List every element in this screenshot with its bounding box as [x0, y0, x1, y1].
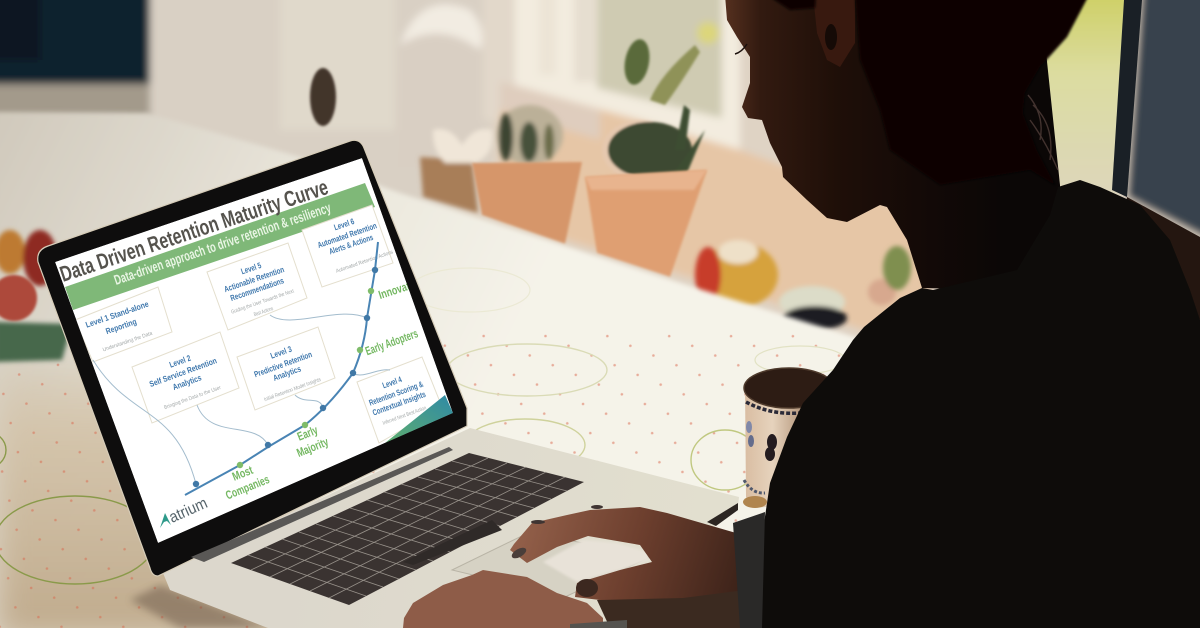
laptop lid and bezel — [38, 140, 467, 576]
woman: hair — [767, 0, 1089, 186]
level 6 box: Level 6 — [332, 216, 356, 232]
curve adoption markers — [237, 288, 374, 468]
maturity curve — [185, 242, 378, 495]
atrium logo: atrium — [167, 495, 210, 527]
photo: table with polka dots — [0, 112, 900, 628]
level 6 box: Alerts & Actions — [328, 232, 375, 256]
level 2 box: Level 2 — [168, 353, 192, 370]
level 1 box: Level 1 Stand-alone — [84, 299, 150, 330]
icon: dark oval on appliance — [310, 68, 336, 126]
woman: right hand on trackpad — [510, 505, 745, 600]
level 6 box — [302, 205, 394, 287]
level 4 box: Level 4 — [381, 374, 403, 390]
level 4 box: Contextual Insights — [371, 389, 427, 417]
level 5 box — [207, 243, 307, 330]
atrium logo — [160, 500, 208, 528]
level 1 box: Understanding the Data — [102, 331, 153, 353]
trackpad — [452, 532, 650, 597]
laptop screen: retention maturity curve slide — [55, 158, 453, 543]
level 4 box — [357, 357, 442, 443]
level 1 box — [75, 287, 172, 362]
level 6 box: Automated Retention — [316, 220, 378, 250]
title: Data Driven Retention Maturity Curve — [57, 174, 331, 287]
shadow under hand — [597, 580, 745, 628]
level 2 box: Analytics — [171, 372, 203, 392]
level 2 box: Self Service Retention — [148, 355, 218, 389]
woman: ear — [813, 0, 855, 67]
hair wisps — [1028, 95, 1058, 170]
icon: left cactus in terracotta pot — [472, 105, 582, 244]
green banner — [65, 183, 375, 310]
banner subtitle: Data-driven approach to drive retention & resiliency — [112, 199, 333, 288]
window frame edge — [1112, 0, 1200, 320]
adoption labels: Innovators — [377, 274, 425, 302]
level 2 box: Bringing the Data to the User — [163, 385, 222, 411]
level 5 box: Guiding the User Towards the Next — [230, 288, 295, 316]
white gap between fingers — [543, 540, 650, 582]
adoption labels: Early Adopters — [363, 326, 420, 358]
laptop shadow on table — [130, 585, 270, 628]
icon: coffee mug — [743, 368, 834, 508]
woman: left hand on keyboard — [403, 570, 627, 628]
curve level markers — [193, 267, 378, 487]
level 5 box: Actionable Retention — [223, 264, 285, 294]
keyboard — [231, 453, 584, 605]
level 4 box: Retention Scoring & — [367, 379, 424, 408]
level 3 box — [237, 327, 335, 410]
woman: eye lashes — [735, 44, 747, 54]
adoption labels — [224, 274, 425, 502]
level 5 box: Recommendations — [229, 275, 285, 303]
level 6 box: Automated Retention Actions — [335, 249, 394, 275]
laptop base — [163, 428, 739, 628]
adoption labels: Companies — [224, 472, 272, 502]
icon: fruit bowl — [0, 230, 72, 362]
woman: cuff — [733, 512, 765, 628]
connector lines — [93, 314, 390, 484]
woman: sweater — [745, 180, 1200, 628]
adoption labels: Majority — [295, 435, 331, 460]
icon: right succulent in terracotta pot — [585, 37, 707, 277]
level 3 box: Analytics — [272, 363, 303, 383]
level 2 box — [132, 332, 239, 423]
icon: orange fruit on sill — [695, 240, 911, 330]
wooden planter — [420, 129, 492, 213]
corner accent — [385, 395, 453, 443]
adoption labels: Early — [295, 423, 320, 444]
woman: neck and face — [725, 0, 1060, 290]
level 5 box: Best Actions — [253, 306, 274, 318]
level 5 box: Level 5 — [239, 260, 263, 276]
level 4 box: Inferred Next Best Action — [382, 405, 427, 427]
level 3 box: Predictive Retention — [253, 349, 313, 379]
level 1 box: Reporting — [104, 316, 138, 336]
level 3 box: Level 3 — [269, 344, 293, 361]
level 3 box: Initial Retention Model Insights — [263, 377, 322, 403]
adoption labels: Most — [230, 463, 255, 484]
